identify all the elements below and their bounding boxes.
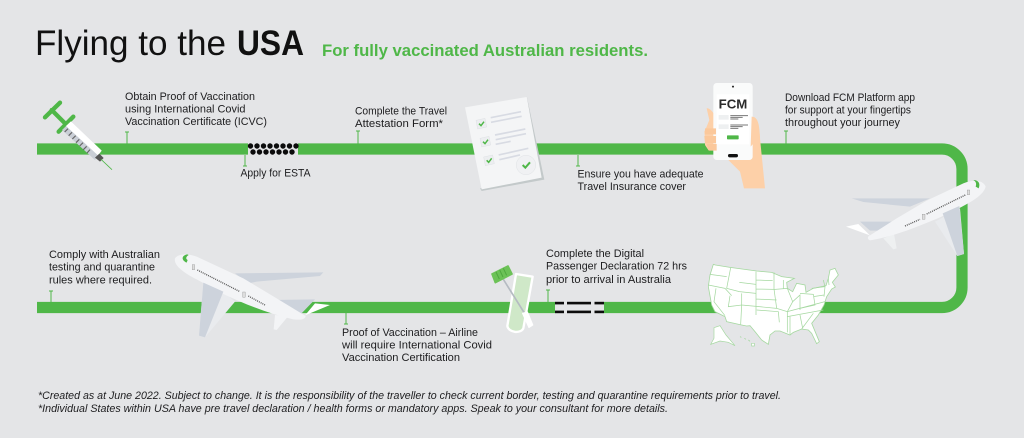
title: Flying to the — [35, 24, 226, 63]
icon: checklist document — [465, 96, 544, 191]
icon: airplane landing — [175, 254, 330, 337]
icon: syringe — [45, 103, 112, 170]
icon: USA map — [708, 264, 838, 346]
text: travel insurance: Ensure you have adequate — [578, 169, 704, 181]
icon: test tube and swab — [492, 266, 533, 332]
text: FCM platform: Download FCM Platform app — [785, 92, 915, 104]
text: airline proof: Proof of Vaccination – Airline — [342, 327, 478, 339]
footnotes: *Individual States within USA have pre travel declaration / health forms or mandatory apps. Speak to your consultant for more details. — [38, 403, 668, 415]
text: proof of vaccination: using International Covid — [125, 104, 246, 116]
title: USA — [237, 24, 304, 63]
text: Australian testing: rules where required. — [49, 274, 152, 286]
text: FCM platform: throughout your journey — [785, 117, 901, 129]
text: travel attestation: Attestation Form* — [355, 118, 444, 130]
text: passenger declaration: Passenger Declaration 72 hrs — [546, 260, 688, 272]
track section: dashed declaration — [555, 302, 604, 314]
text: Australian testing: Comply with Australian — [49, 249, 160, 261]
text: Australian testing: testing and quarantine — [49, 262, 155, 274]
journey track — [37, 149, 962, 308]
text: proof of vaccination: Vaccination Certificate (ICVC) — [125, 116, 267, 128]
text: ESTA: Apply for ESTA — [240, 168, 311, 180]
text: FCM platform: for support at your fingertips — [785, 104, 912, 116]
text: passenger declaration: prior to arrival in Australia — [546, 274, 671, 286]
footnotes: *Created as at June 2022. Subject to change. It is the responsibility of the traveller to check current border, testing and quarantine requirements prior to travel. — [38, 390, 781, 402]
icon: airplane taking off — [846, 180, 986, 256]
track section: dotted ESTA — [248, 143, 299, 156]
text: airline proof: Vaccination Certification — [342, 352, 460, 364]
text: airline proof: will require International Covid — [341, 340, 492, 352]
subtitle: For fully vaccinated Australian residents. — [322, 41, 648, 60]
icon: phone in hand with FCM app: FCM — [719, 98, 747, 112]
text: travel attestation: Complete the Travel — [355, 106, 447, 118]
text: travel insurance: Travel Insurance cover — [578, 181, 686, 193]
text: proof of vaccination: Obtain Proof of Vaccination — [125, 91, 255, 103]
text: passenger declaration: Complete the Digital — [546, 248, 644, 260]
step markers — [49, 131, 788, 324]
icon: phone in hand with FCM app — [704, 83, 765, 188]
